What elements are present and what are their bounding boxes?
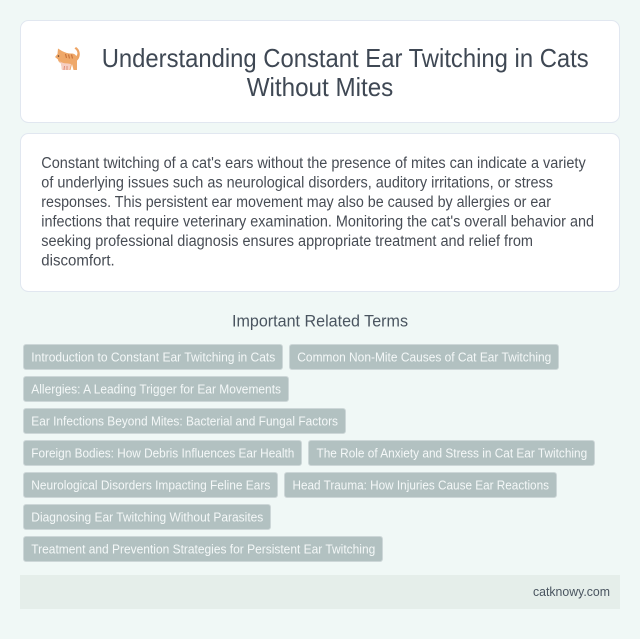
footer bar [20,575,620,609]
tag: head trauma [284,472,556,498]
tag: treatment [24,536,382,562]
tag: introduction [24,344,282,370]
footer source text: catknowy.com [533,585,610,599]
description text: responses. This persistent ear movement may also be caused by allergies or ear [41,194,551,211]
heading: important related terms: Important Related Terms [232,312,408,330]
description text: of underlying issues such as neurological disorders, auditory irritations, or stress [41,175,553,192]
tag: treatment: Treatment and Prevention Strategies for Persistent Ear Twitching [31,541,375,556]
panel: title card [20,20,620,122]
tag: ear infections [24,408,346,434]
tag: common causes: Common Non-Mite Causes of Cat Ear Twitching [297,349,551,364]
tag: foreign bodies: Foreign Bodies: How Debris Influences Ear Health [31,445,294,460]
tag: anxiety and stress [308,440,594,466]
tag: ear infections: Ear Infections Beyond Mites: Bacterial and Fungal Factors [31,413,338,428]
tag: allergies: Allergies: A Leading Trigger for Ear Movements [31,381,281,396]
description text: infections that require veterinary examination. Monitoring the cat's overall behavior and [41,214,594,231]
title text: Without Mites [247,74,393,102]
description text: seeking professional diagnosis ensures appropriate treatment and relief from [41,233,533,250]
description text: discomfort. [41,253,115,270]
tag: common causes [290,344,558,370]
tag: allergies [24,376,288,402]
tag: head trauma: Head Trauma: How Injuries Cause Ear Reactions [292,477,549,492]
tag: introduction: Introduction to Constant Ear Twitching in Cats [31,349,275,364]
tag list [24,344,594,562]
tag: diagnosing [24,504,270,530]
tag: foreign bodies [24,440,302,466]
panel: description card [20,134,620,292]
description text [41,155,594,270]
tag: diagnosing: Diagnosing Ear Twitching Without Parasites [31,509,263,524]
description text: Constant twitching of a cat's ears without the presence of mites can indicate a variety [41,155,586,172]
tag: neurological disorders [24,472,278,498]
icon: orange cat [55,47,80,70]
title text: Understanding Constant Ear Twitching in Cats [102,45,589,73]
tag: anxiety and stress: The Role of Anxiety and Stress in Cat Ear Twitching [316,445,587,460]
tag: neurological disorders: Neurological Disorders Impacting Feline Ears [31,477,270,492]
title text [102,45,589,102]
